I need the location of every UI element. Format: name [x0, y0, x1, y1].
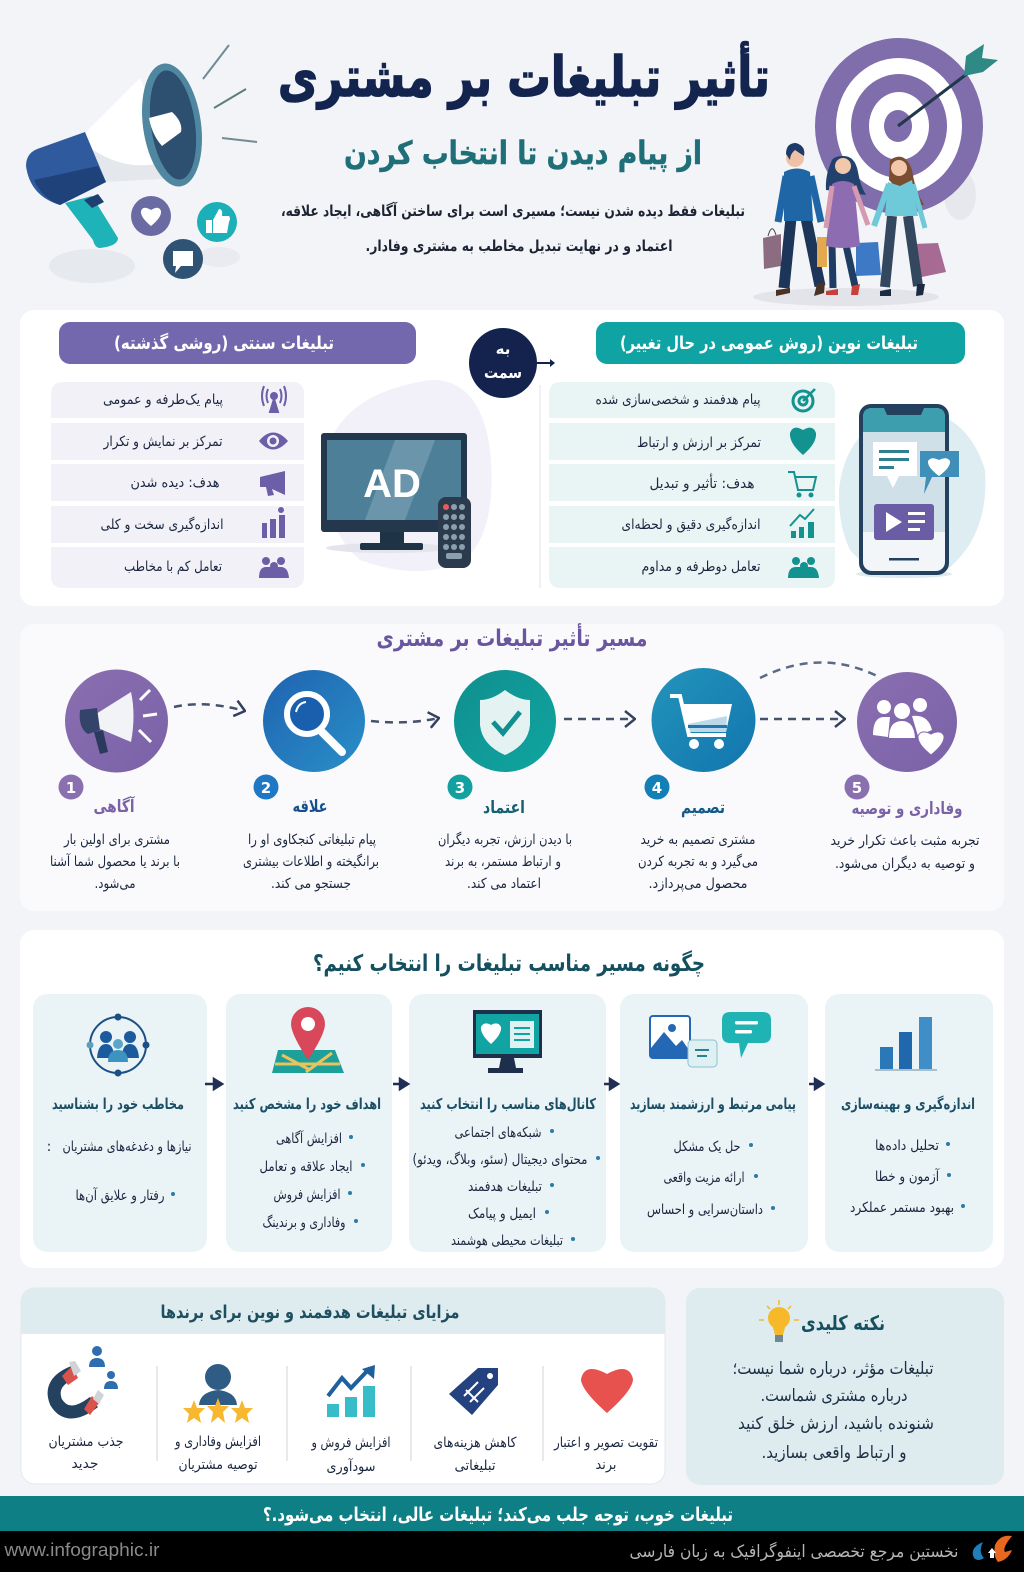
- heading: how to choose: چگونه مسیر مناسب تبلیغات را انتخاب کنیم؟: [313, 950, 705, 977]
- heading: traditional advertising: تبلیغات سنتی (روشی گذشته): [114, 332, 334, 354]
- header: [26, 38, 998, 306]
- card: set your goals: [226, 994, 392, 1252]
- takeaway text: درباره مشتری شماست.: [760, 1386, 908, 1406]
- card: set your goals: ایجاد علاقه و تعامل: [260, 1159, 352, 1175]
- card: know your audience: [33, 994, 207, 1252]
- icon: heart teal: [790, 428, 816, 455]
- icon: target with arrow: [815, 38, 998, 220]
- step 4 decision: می‌گیرد و به تجربه کردن: [638, 853, 758, 870]
- icon: growth chart: [790, 509, 814, 538]
- icon: bars: [262, 507, 285, 538]
- arrow: card 4 to 5: [809, 1079, 823, 1089]
- card: relevant message: پیامی مرتبط و ارزشمند بسازید: [630, 1095, 796, 1114]
- footer credit bar: [0, 1531, 1024, 1572]
- illustration: smartphone: [839, 404, 985, 578]
- list: modern traits: تعامل دوطرفه و مداوم: [642, 559, 761, 575]
- arrow: step 2 to 3: [371, 718, 439, 722]
- intro paragraph: اعتماد و در نهایت تبدیل مخاطب به مشتری وفادار.: [366, 237, 672, 255]
- icon: target small: [793, 389, 815, 411]
- step 3 trust: 3: [455, 779, 465, 797]
- panel: customer journey: [20, 622, 1004, 911]
- illustration: TV with AD: AD: [363, 462, 421, 506]
- arrow: card 2 to 3: [393, 1079, 408, 1089]
- arrow: card 3 to 4: [604, 1079, 618, 1089]
- icon: logo: [973, 1536, 1012, 1562]
- step 2 interest: [243, 670, 379, 892]
- list: modern traits: هدف: تأثیر و تبدیل: [650, 473, 754, 492]
- card: set your goals: اهداف خود را مشخص کنید: [233, 1095, 381, 1113]
- arrow: card 1 to 2: [205, 1079, 222, 1089]
- list: traditional traits: تمرکز بر نمایش و تکرار: [103, 434, 223, 450]
- takeaway text: شنونده باشید، ارزش خلق کنید: [738, 1414, 934, 1434]
- subtitle: از پیام دیدن تا انتخاب کردن: [344, 134, 702, 172]
- step 3 trust: با دیدن ارزش، تجربه دیگران: [438, 831, 572, 848]
- card: relevant message: [620, 994, 808, 1252]
- icon: broadcast: [262, 386, 286, 412]
- icon: people: [259, 557, 289, 578]
- step 4 decision: تصمیم: [681, 798, 725, 818]
- step 5 loyalty: [830, 672, 980, 872]
- step 1 awareness: 1: [66, 779, 76, 797]
- card: measure and optimize: بهبود مستمر عملکرد: [850, 1200, 954, 1216]
- tagline: نخستین مرجع تخصصی اینفوگرافیک به زبان فارسی: [630, 1541, 958, 1562]
- benefit: attract customers: جدید: [72, 1456, 98, 1472]
- intro paragraph: [281, 202, 745, 255]
- heading: benefits: مزایای تبلیغات هدفمند و نوین برای برندها: [160, 1302, 460, 1323]
- list: modern traits: تمرکز بر ارزش و ارتباط: [637, 435, 761, 451]
- list: traditional traits: هدف: دیده شدن: [130, 475, 220, 491]
- arrow: step 4 to 5: [760, 718, 845, 720]
- list: traditional traits: [51, 382, 304, 588]
- benefit: loyalty: افزایش وفاداری و: [174, 1434, 261, 1450]
- illustration: shoppers: [753, 143, 946, 306]
- card: measure and optimize: اندازه‌گیری و بهینه‌سازی: [841, 1095, 975, 1113]
- step 5 loyalty: 5: [852, 779, 862, 797]
- benefit: cost reduction: تبلیغاتی: [454, 1458, 496, 1474]
- card: relevant message: داستان‌سرایی و احساس: [647, 1202, 763, 1218]
- icon: people teal: [788, 557, 819, 578]
- benefit: sales growth: سودآوری: [326, 1458, 376, 1475]
- woman with purple dress: [817, 156, 881, 295]
- step 4 decision: محصول می‌پردازد.: [648, 876, 748, 892]
- step 2 interest: پیام تبلیغاتی کنجکاوی او را: [248, 832, 376, 848]
- icon: light bulb: [759, 1300, 799, 1342]
- benefit: brand image: [553, 1369, 658, 1473]
- benefit: brand image: تقویت تصویر و اعتبار: [553, 1435, 658, 1451]
- card: relevant message: حل یک مشکل: [674, 1139, 740, 1155]
- takeaway text: و ارتباط واقعی بسازید.: [762, 1443, 906, 1463]
- card: measure and optimize: [825, 994, 993, 1252]
- arrow: towards badge: به: [496, 340, 510, 358]
- panel: how to choose: [20, 930, 1004, 1268]
- arrow: step 1 to 2: [174, 704, 245, 711]
- step 5 loyalty: تجربه مثبت باعث تکرار خرید: [830, 833, 980, 849]
- intro paragraph: تبلیغات فقط دیده شدن نیست؛ مسیری است برای ساختن آگاهی، ایجاد علاقه،: [281, 202, 745, 220]
- arrow: towards badge: [469, 328, 555, 398]
- footer banner: [0, 1496, 1024, 1531]
- title: تأثیر تبلیغات بر مشتری: [278, 41, 770, 109]
- heading: modern advertising: تبلیغات نوین (روش عمومی در حال تغییر): [620, 333, 918, 354]
- step 3 trust: اعتماد: [483, 798, 525, 818]
- step 2 interest: علاقه: [292, 797, 328, 817]
- step 4 decision: مشتری تصمیم به خرید: [640, 832, 756, 848]
- list: traditional traits: تعامل کم با مخاطب: [124, 559, 222, 575]
- card: set your goals: وفاداری و برندینگ: [262, 1214, 346, 1231]
- step 5 loyalty: و توصیه به دیگران می‌شود.: [835, 855, 975, 872]
- step 2 interest: جستجو می کند.: [271, 876, 351, 892]
- card: set your goals: افزایش فروش: [274, 1187, 340, 1203]
- icon: eye: [259, 432, 288, 450]
- card: choose channels: محتوای دیجیتال (سئو، وبلاگ، ویدئو): [412, 1150, 588, 1168]
- icon: cart: [788, 472, 816, 496]
- step 4 decision: 4: [652, 779, 662, 797]
- website url: www.infographic.ir: [3, 1540, 159, 1560]
- benefit: brand image: برند: [596, 1457, 616, 1473]
- card: choose channels: تبلیغات محیطی هوشمند: [451, 1233, 563, 1249]
- takeaway text: تبلیغات مؤثر، درباره شما نیست؛: [732, 1359, 934, 1379]
- icon: video card: [874, 504, 934, 540]
- step 1 awareness: می‌شود.: [94, 876, 136, 892]
- icon: message bubble: [873, 442, 917, 488]
- list: modern traits: پیام هدفمند و شخصی‌سازی شده: [596, 392, 761, 408]
- benefit: cost reduction: کاهش هزینه‌های: [434, 1435, 517, 1451]
- step 1 awareness: با برند یا محصول شما آشنا: [50, 853, 180, 870]
- list: traditional traits: اندازه‌گیری سخت و کلی: [100, 516, 224, 533]
- benefit: loyalty: توصیه مشتریان: [178, 1457, 258, 1473]
- arrow: towards badge: سمت: [484, 363, 522, 382]
- benefit: cost reduction: [434, 1368, 517, 1474]
- card: know your audience: مخاطب خود را بشناسید: [52, 1095, 184, 1113]
- icon: megaphone small: [260, 471, 285, 496]
- panel: key takeaway: [686, 1288, 1004, 1485]
- card: relevant message: ارائه مزیت واقعی: [664, 1170, 744, 1186]
- panel: traditional vs modern advertising: [20, 310, 1004, 606]
- woman with teal top: [874, 157, 946, 296]
- arrow: loop from 5 to 4: [760, 662, 877, 678]
- heading: customer journey: مسیر تأثیر تبلیغات بر مشتری: [376, 622, 648, 652]
- icon: heart bubble: [920, 451, 959, 494]
- step 1 awareness: آگاهی: [94, 795, 135, 817]
- card: measure and optimize: آزمون و خطا: [875, 1168, 940, 1185]
- icon: megaphone: [26, 45, 257, 283]
- heading: key takeaway: نکته کلیدی: [801, 1311, 885, 1335]
- list: modern traits: اندازه‌گیری دقیق و لحظه‌ای: [622, 516, 760, 533]
- icon: heart badge: [131, 196, 171, 236]
- illustration: TV with AD: [321, 380, 492, 571]
- step 1 awareness: مشتری برای اولین بار: [63, 832, 170, 848]
- card: choose channels: ایمیل و پیامک: [468, 1206, 536, 1222]
- benefit: loyalty: [174, 1364, 261, 1473]
- step 3 trust: [438, 670, 572, 892]
- step 2 interest: 2: [261, 779, 271, 797]
- card: know your audience: نیازها و دغدغه‌های مشتریان: [62, 1139, 192, 1155]
- man: [763, 143, 825, 296]
- panel: benefits: [21, 1288, 665, 1484]
- list: modern traits: [549, 382, 835, 588]
- step 3 trust: اعتماد می کند.: [467, 876, 541, 892]
- card: choose channels: کانال‌های مناسب را انتخاب کنید: [420, 1095, 596, 1113]
- icon: chat badge: [163, 239, 203, 279]
- icon: remote: [438, 497, 471, 568]
- step 1 awareness: [50, 670, 180, 892]
- icon: thumbs up badge: [197, 202, 237, 242]
- card: choose channels: شبکه‌های اجتماعی: [454, 1125, 542, 1141]
- benefit: sales growth: [311, 1365, 390, 1475]
- benefit: sales growth: افزایش فروش و: [311, 1435, 390, 1451]
- step 3 trust: و ارتباط مستمر، به برند: [445, 854, 561, 870]
- card: choose channels: [409, 994, 606, 1252]
- benefit: attract customers: [48, 1346, 124, 1472]
- heading: traditional advertising: [59, 322, 416, 364]
- step 5 loyalty: وفاداری و توصیه: [852, 799, 962, 819]
- card: know your audience: رفتار و علایق آن‌ها: [76, 1187, 164, 1204]
- footer banner: تبلیغات خوب، توجه جلب می‌کند؛ تبلیغات عالی، انتخاب می‌شود.؟: [263, 1504, 733, 1526]
- card: set your goals: افزایش آگاهی: [276, 1130, 342, 1147]
- card: know your audience: :: [47, 1139, 51, 1155]
- heading: modern advertising: [596, 322, 965, 364]
- step 2 interest: برانگیخته و اطلاعات بیشتری: [243, 853, 379, 870]
- card: choose channels: تبلیغات هدفمند: [468, 1179, 542, 1195]
- takeaway text: [732, 1359, 934, 1463]
- step 4 decision: [638, 668, 758, 892]
- benefit: attract customers: جذب مشتریان: [48, 1434, 124, 1450]
- arrow: step 3 to 4: [564, 718, 635, 720]
- card: measure and optimize: تحلیل داده‌ها: [875, 1138, 939, 1154]
- list: traditional traits: پیام یک‌طرفه و عمومی: [103, 392, 223, 408]
